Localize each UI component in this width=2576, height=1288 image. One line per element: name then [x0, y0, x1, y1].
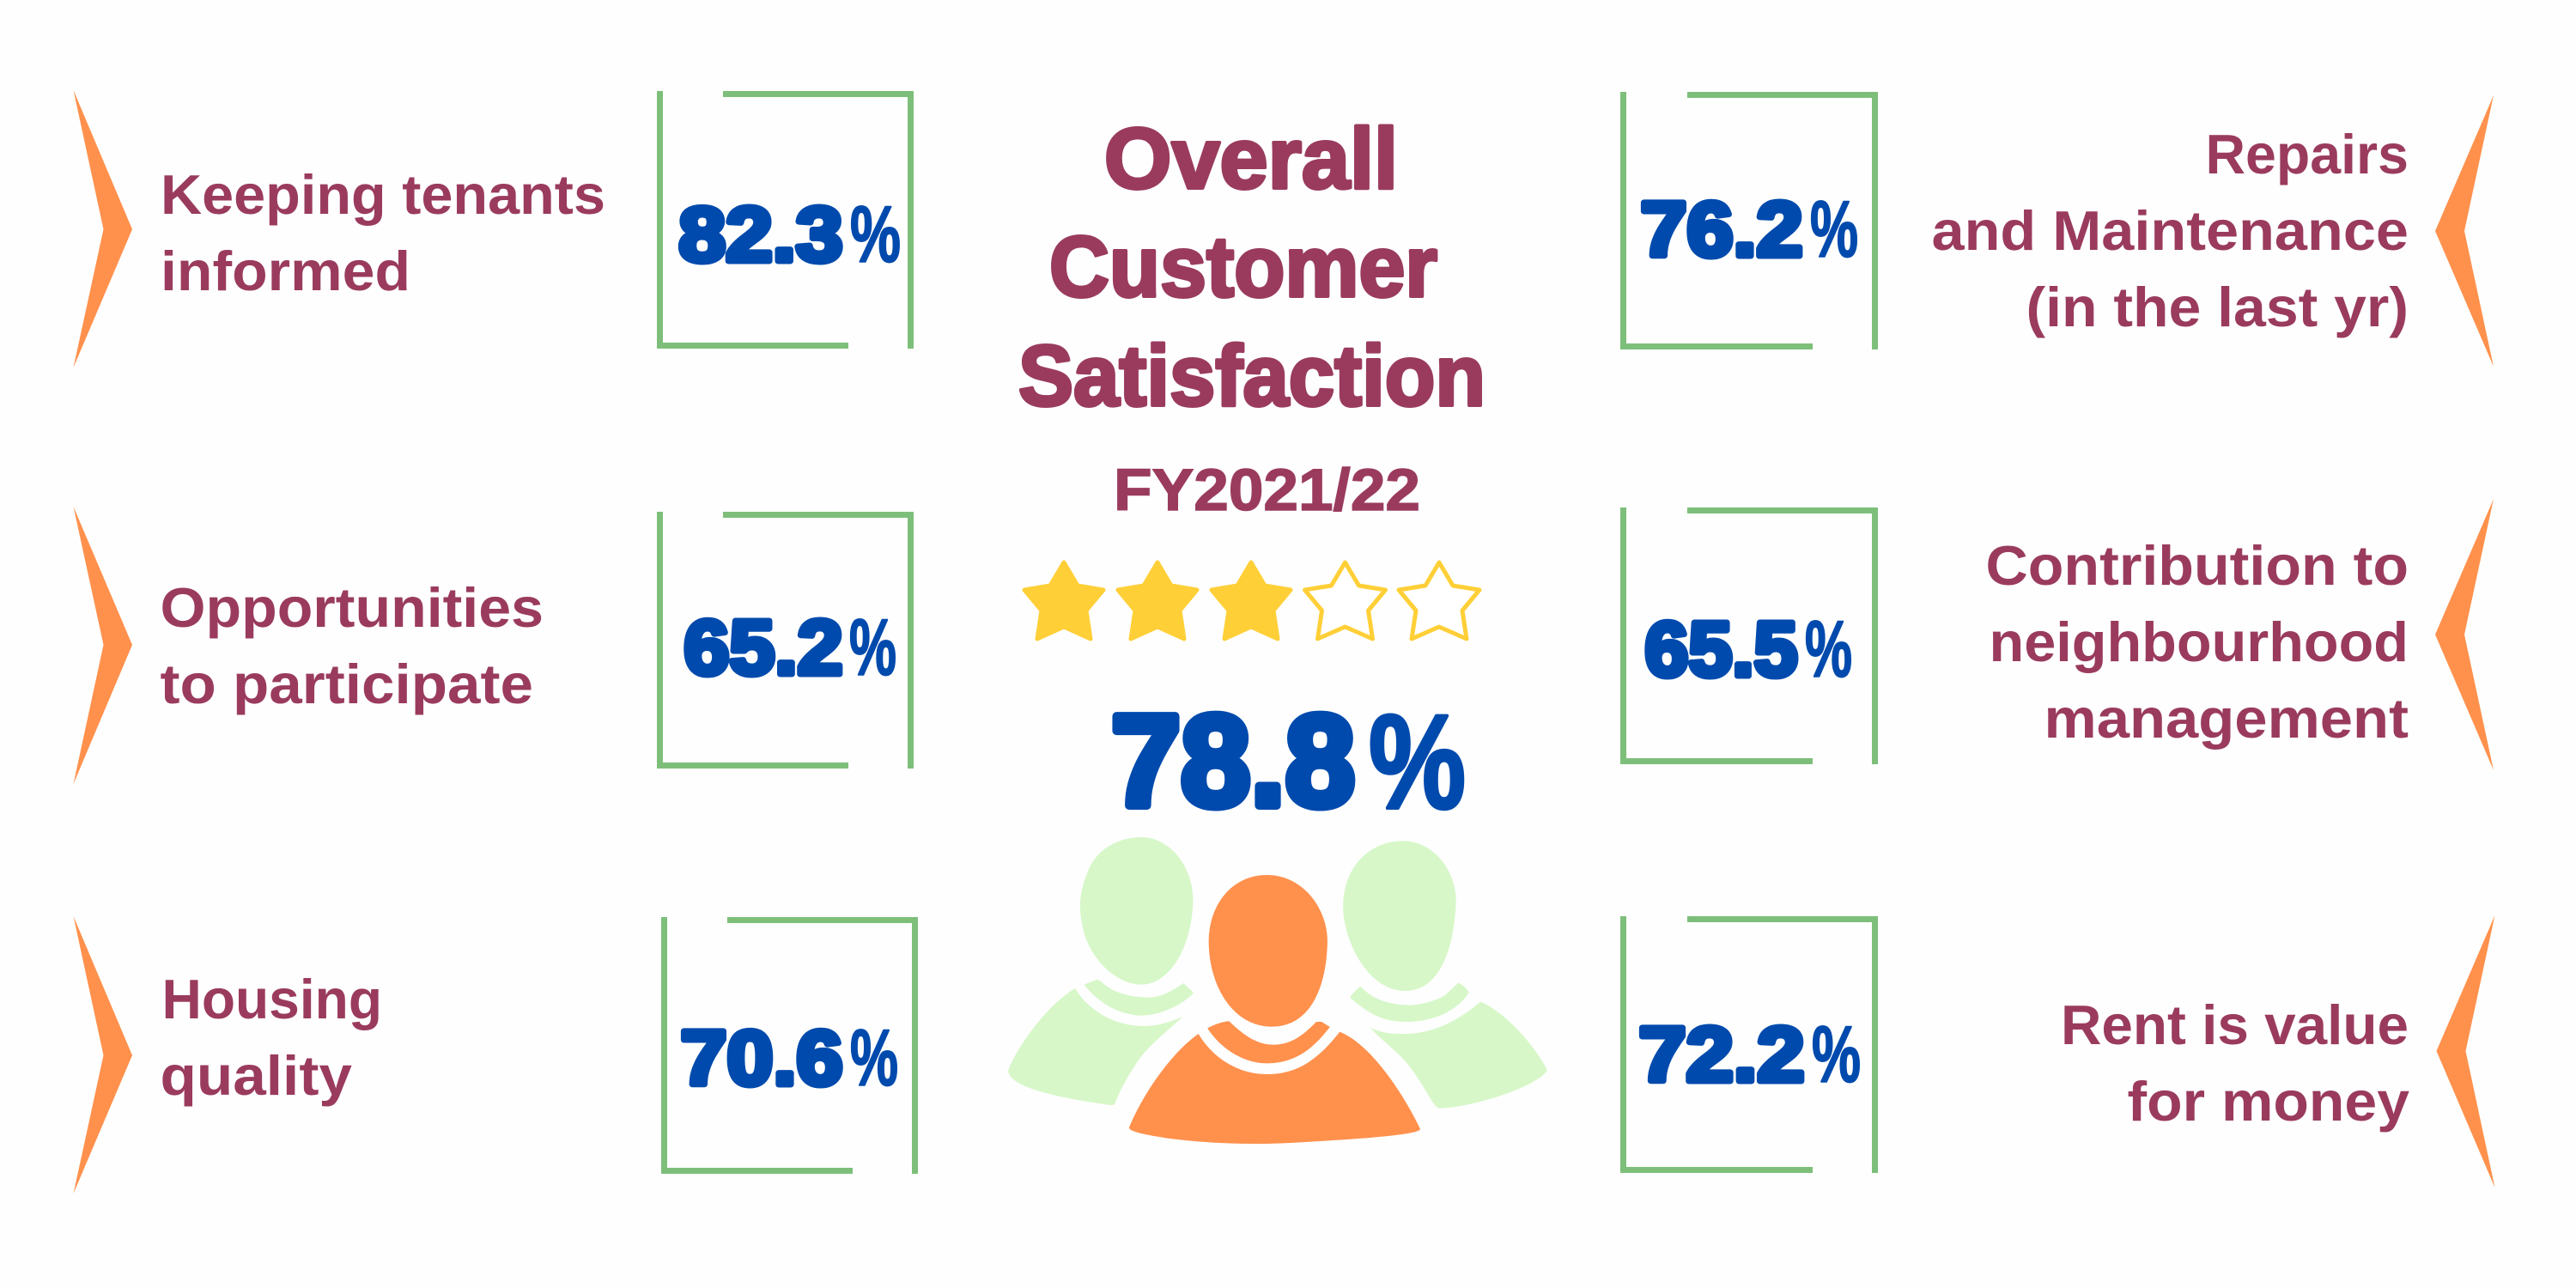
- icon: orange chevron: [2435, 95, 2494, 367]
- value: 72.2%: [1638, 1010, 1861, 1099]
- panel: Opportunities to participate: [74, 507, 910, 784]
- value: 82.3%: 82.3: [678, 192, 843, 278]
- value frame: [1623, 916, 1875, 1173]
- value frame: [1623, 92, 1875, 349]
- value frame: [1623, 507, 1875, 764]
- label: Keeping tenants informed: informed: [161, 240, 410, 302]
- icon: orange chevron: [2437, 915, 2495, 1188]
- label: Rent is value for money: Rent is value: [2061, 993, 2409, 1056]
- label: Repairs and Maintenance (in the last yr): and Maintenance: [1932, 199, 2409, 262]
- panel: Rent is value for money: [1623, 915, 2495, 1188]
- subtitle: FY2021/22: FY2021/22: [1114, 457, 1420, 523]
- icon: orange chevron: [74, 90, 132, 368]
- label: Opportunities to participate: to participate: [160, 653, 533, 715]
- value: 65.5%: [1645, 605, 1852, 694]
- icon: orange chevron: [2435, 499, 2494, 770]
- overall score: 78.8%: [1111, 688, 1466, 837]
- label: Opportunities to participate: Opportunities: [160, 576, 544, 639]
- label: Repairs and Maintenance (in the last yr): Repairs: [2205, 123, 2409, 185]
- label: Repairs and Maintenance (in the last yr): (in the last yr): [2026, 276, 2409, 338]
- label: Contribution to neighbourhood management: [1985, 534, 2409, 750]
- label: Opportunities to participate: [160, 576, 544, 715]
- value: 76.2%: 76.2: [1640, 187, 1803, 273]
- overall score: 78.8%: %: [1369, 688, 1466, 837]
- value: 82.3%: %: [850, 190, 901, 279]
- icon: orange chevron: [74, 507, 132, 784]
- label: Rent is value for money: [2061, 993, 2409, 1133]
- label: Contribution to neighbourhood management: management: [2044, 687, 2409, 750]
- label: Keeping tenants informed: [161, 163, 605, 302]
- label: Contribution to neighbourhood management: Contribution to: [1985, 534, 2409, 597]
- label: Housing quality: quality: [160, 1044, 352, 1107]
- label: Rent is value for money: for money: [2128, 1070, 2409, 1133]
- value: 76.2%: %: [1810, 185, 1858, 274]
- label: Repairs and Maintenance (in the last yr): [1932, 123, 2409, 338]
- value: 65.2%: [683, 603, 896, 692]
- title: Customer: [1049, 219, 1437, 315]
- star rating: three of five: [1024, 562, 1479, 639]
- panel: Repairs and Maintenance: [1623, 92, 2494, 367]
- icon: group of three people: [1008, 837, 1547, 1144]
- label: Keeping tenants informed: Keeping tenants: [161, 163, 605, 226]
- value: 65.5%: %: [1805, 605, 1852, 694]
- value: 76.2%: [1640, 185, 1858, 274]
- value frame: [659, 512, 910, 769]
- label: Contribution to neighbourhood management: neighbourhood: [1989, 611, 2409, 673]
- value: 82.3%: [678, 190, 901, 279]
- panel: Housing quality: [74, 916, 915, 1194]
- value: 65.2%: %: [849, 603, 896, 692]
- value frame: [659, 91, 910, 349]
- value: 65.2%: 65.2: [683, 605, 843, 691]
- value: 72.2%: %: [1812, 1010, 1861, 1099]
- title: Satisfaction: [1018, 328, 1485, 424]
- title: [1018, 111, 1485, 424]
- value: 70.6%: 70.6: [680, 1016, 843, 1102]
- panel: Contribution to neighbourhood management: [1623, 499, 2494, 770]
- icon: orange chevron: [74, 916, 132, 1194]
- value frame: [665, 917, 915, 1174]
- panel: Keeping tenants informed: [74, 90, 910, 368]
- overall score: 78.8%: 78.8: [1111, 688, 1355, 833]
- value: 72.2%: 72.2: [1638, 1012, 1805, 1098]
- value: 70.6%: %: [850, 1013, 898, 1103]
- value: 65.5%: 65.5: [1645, 607, 1798, 693]
- value: 70.6%: [680, 1013, 898, 1103]
- label: Housing quality: Housing: [161, 968, 382, 1030]
- label: Housing quality: [160, 968, 382, 1107]
- title: Overall: [1104, 111, 1398, 207]
